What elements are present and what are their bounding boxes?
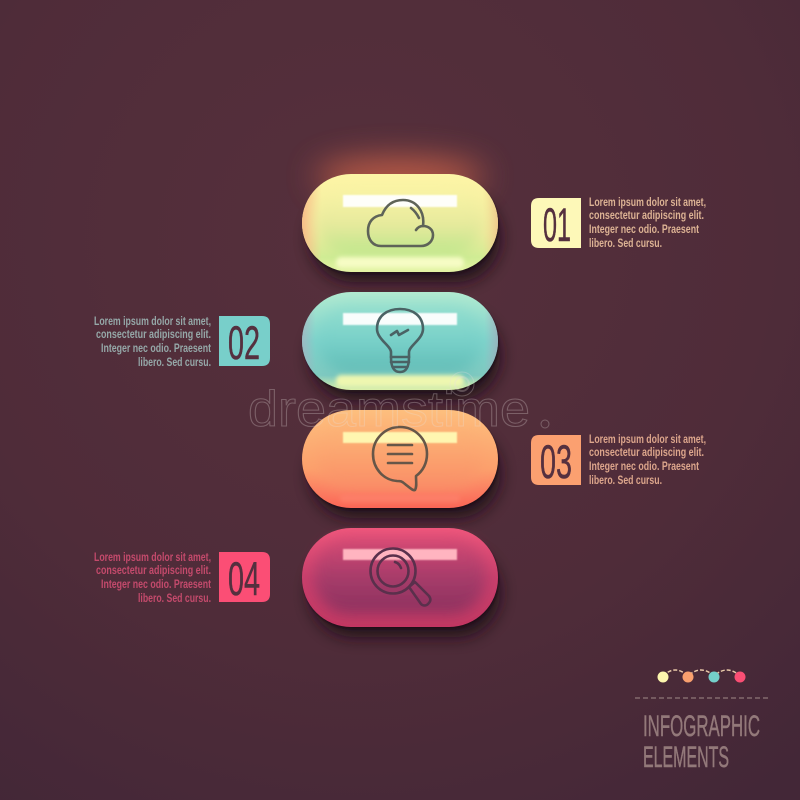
icon: cloud [368, 200, 433, 246]
text block 02: libero. Sed cursu. [138, 357, 211, 369]
text block 01: Integer nec odio. Praesent [589, 224, 699, 236]
text block 02: Lorem ipsum dolor sit amet, [94, 316, 211, 328]
callout 04 [94, 552, 270, 605]
text block 01: libero. Sed cursu. [589, 238, 662, 250]
footer title [635, 698, 768, 774]
text block 03 [589, 434, 706, 487]
watermark: dreamstime [248, 381, 530, 437]
text block 04: libero. Sed cursu. [138, 593, 211, 605]
number badge 04 [219, 552, 270, 605]
text block 04: Integer nec odio. Praesent [101, 579, 211, 591]
text block 04: Lorem ipsum dolor sit amet, [94, 552, 211, 564]
callout 01 [531, 197, 706, 251]
capsule 2: light bulb [302, 292, 500, 400]
callout 03 [531, 434, 706, 488]
number badge 01 [531, 198, 581, 251]
text block 03: libero. Sed cursu. [589, 475, 662, 487]
number badge 04: 04 [228, 552, 260, 605]
text block 02: Integer nec odio. Praesent [101, 343, 211, 355]
capsule 1: cloud [302, 174, 500, 282]
icon: magnifier [370, 548, 430, 606]
text block 01 [589, 197, 706, 250]
icon: speech bubble [373, 427, 427, 490]
number badge 02 [219, 316, 270, 369]
callout 02 [94, 316, 270, 369]
number badge 02: 02 [228, 316, 260, 369]
text block 02: consectetur adipiscing elit. [96, 329, 211, 341]
number badge 03 [531, 435, 581, 488]
number badge 03: 03 [540, 435, 572, 488]
number badge 01: 01 [543, 198, 571, 251]
text block 03: Lorem ipsum dolor sit amet, [589, 434, 706, 446]
footer title: ELEMENTS [643, 741, 729, 774]
text block 01: consectetur adipiscing elit. [589, 210, 704, 222]
glow above first capsule [315, 158, 485, 194]
text block 03: consectetur adipiscing elit. [589, 447, 704, 459]
text block 04: consectetur adipiscing elit. [96, 565, 211, 577]
text block 03: Integer nec odio. Praesent [589, 461, 699, 473]
capsule 4: magnifier [302, 528, 500, 637]
text block 02 [94, 316, 211, 369]
text block 01: Lorem ipsum dolor sit amet, [589, 197, 706, 209]
capsule 3: speech bubble [302, 410, 500, 518]
legend: dotted chain [658, 670, 746, 682]
text block 04 [94, 552, 211, 605]
icon: light bulb [377, 309, 423, 372]
